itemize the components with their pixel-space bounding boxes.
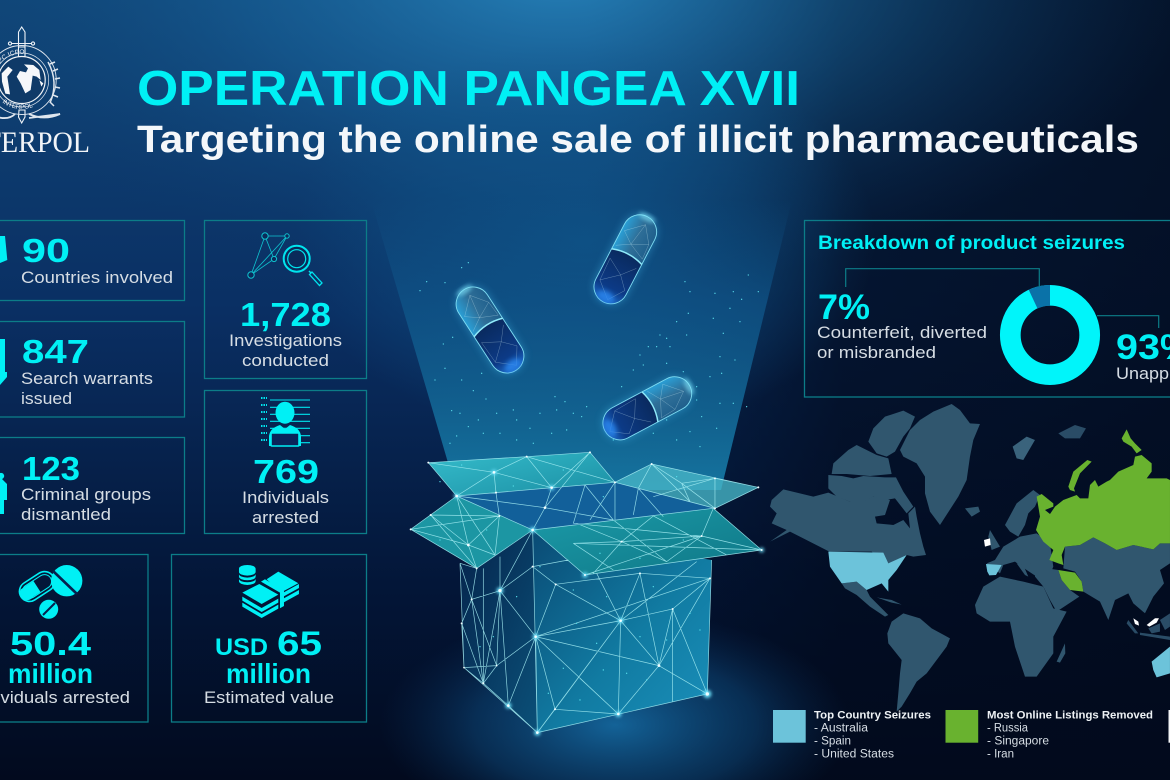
- label: counterfeit: Counterfeit, diverted: [817, 323, 987, 342]
- stat: 50.4: 50.4: [10, 625, 92, 662]
- legend: most online listings removed: - Russia: [987, 722, 1029, 734]
- map: Australia: [1152, 647, 1170, 677]
- icon: pills: [15, 565, 82, 619]
- map: Canada, Greenland and Europe: [770, 404, 1053, 577]
- panel: USD 65 million: [172, 554, 366, 722]
- label: Countries involved: [21, 268, 173, 287]
- Franz Josef Land: [1058, 425, 1086, 438]
- title: OPERATION PANGEA XVII: [137, 62, 800, 116]
- world map: [770, 404, 1170, 712]
- panel: breakdown of product seizures: [804, 220, 1170, 397]
- Iran: [1058, 570, 1083, 592]
- title: [137, 62, 1139, 161]
- icon: warrant document and shield: [0, 339, 7, 385]
- Asia: [1063, 537, 1170, 620]
- illustration: capsule left: [448, 278, 532, 381]
- label: Estimated value: [204, 688, 334, 707]
- back flaps: [428, 452, 758, 508]
- panel: countries involved: [0, 220, 184, 300]
- subtitle: Targeting the online sale of illicit pharmaceuticals: [137, 119, 1139, 161]
- label: conducted: [242, 351, 329, 370]
- legend: top country seizures: [773, 710, 931, 760]
- legend: top country seizures: - Spain: [814, 736, 851, 748]
- front and left flaps: [411, 496, 762, 575]
- illustration: capsule lower right: [596, 369, 700, 447]
- Greenland: [900, 404, 980, 525]
- legend: most online listings removed: - Iran: [987, 748, 1014, 760]
- stat: USD 65: [215, 625, 322, 663]
- box front face: [533, 530, 712, 733]
- Scandinavia: [1005, 490, 1040, 537]
- sparkle particles: [420, 263, 758, 447]
- Indonesia: [1127, 613, 1170, 640]
- panel: investigations: [204, 220, 366, 378]
- icon: globe: [0, 45, 57, 115]
- Caribbean: [877, 597, 902, 605]
- central Arctic islands: [832, 445, 892, 476]
- heading: Breakdown of product seizures: [818, 232, 1125, 254]
- stat: 769: 769: [253, 453, 319, 490]
- panel: criminal groups: [0, 438, 184, 534]
- label: issued: [21, 389, 72, 408]
- stat: USD 65: USD: [215, 634, 268, 661]
- stat: 123: 123: [22, 450, 80, 487]
- stat: 90: 90: [22, 232, 70, 269]
- Russia: [1036, 429, 1170, 565]
- Ireland: [984, 538, 991, 547]
- Arabia and Turkey: [1035, 567, 1079, 612]
- icon: clipped person: [0, 473, 7, 514]
- label: counterfeit: or misbranded: [817, 343, 936, 362]
- Madagascar: [1057, 643, 1065, 663]
- logo: INTERPOL emblem: [0, 26, 90, 159]
- Mexico and Central America: [842, 582, 888, 617]
- Iceland: [965, 507, 980, 517]
- panel: search warrants: [0, 322, 184, 417]
- label: arrested: [252, 508, 319, 527]
- legend: third swatch, clipped at the edge: [1168, 710, 1170, 743]
- legend: most online listings removed: [946, 710, 1153, 760]
- illustration: capsule upper right: [587, 207, 664, 311]
- label: Individuals: [242, 488, 329, 507]
- label: Criminal groups: [21, 485, 151, 504]
- leader line 93%: [1097, 316, 1159, 328]
- panel: individuals arrested: [204, 390, 366, 534]
- Ellesmere island: [868, 411, 915, 457]
- label: Search warrants: [21, 369, 153, 388]
- stat unit: million: million: [8, 658, 93, 689]
- illustration: open wireframe box: [410, 451, 764, 736]
- legend: top country seizures: Top Country Seizures: [814, 710, 931, 722]
- icon: wreath and scales: [0, 62, 60, 118]
- box inner back wall: [457, 482, 715, 530]
- glowing nodes: [454, 470, 764, 736]
- continental Europe: [987, 533, 1053, 577]
- wireframe mesh: [411, 452, 762, 733]
- legend: most online listings removed: Most Online Listings Removed: [987, 710, 1153, 722]
- Baffin and nearby islands: [828, 475, 913, 513]
- panel: 50.4 million: [0, 554, 148, 722]
- leader line 7%: [846, 269, 1039, 287]
- particles inside box: [440, 465, 700, 700]
- Africa: [975, 577, 1067, 677]
- South America: [887, 613, 950, 712]
- icon: sword: [8, 27, 35, 123]
- stat: USD 65: 65: [277, 625, 322, 663]
- icon: clipped flag: [0, 236, 7, 263]
- stat: 1,728: 1,728: [240, 296, 331, 333]
- map: Eurasia: [1035, 429, 1170, 627]
- label: dismantled: [21, 505, 111, 524]
- stat: 7%: 7%: [818, 288, 870, 327]
- map: Americas, Africa and islands: [842, 425, 1170, 712]
- icon: network and magnifier: [248, 233, 322, 286]
- legend: top country seizures: - Australia: [814, 722, 869, 734]
- donut chart: [1010, 285, 1090, 375]
- Alaska and Canada: [770, 489, 926, 565]
- box left face: [460, 530, 537, 733]
- map: Spain: [986, 564, 1002, 575]
- Singapore and Malaysia highlight: [1133, 618, 1159, 627]
- icon: mugshot with laptop: [261, 398, 310, 446]
- Italy and Balkans: [1017, 563, 1042, 578]
- legend: top country seizures: - United States: [814, 748, 894, 760]
- map: United States: [828, 552, 907, 592]
- Britain: [988, 530, 1000, 550]
- legend: most online listings removed: - Singapore: [987, 736, 1049, 748]
- stat unit: million: million: [226, 658, 311, 689]
- icon: globe: INTERPOL: [2, 99, 33, 109]
- icon: coins and banknotes: [239, 565, 299, 618]
- stat: 847: 847: [22, 333, 89, 370]
- label: Investigations: [229, 331, 342, 350]
- Svalbard: [1013, 437, 1035, 460]
- light beam above the box: [371, 200, 792, 490]
